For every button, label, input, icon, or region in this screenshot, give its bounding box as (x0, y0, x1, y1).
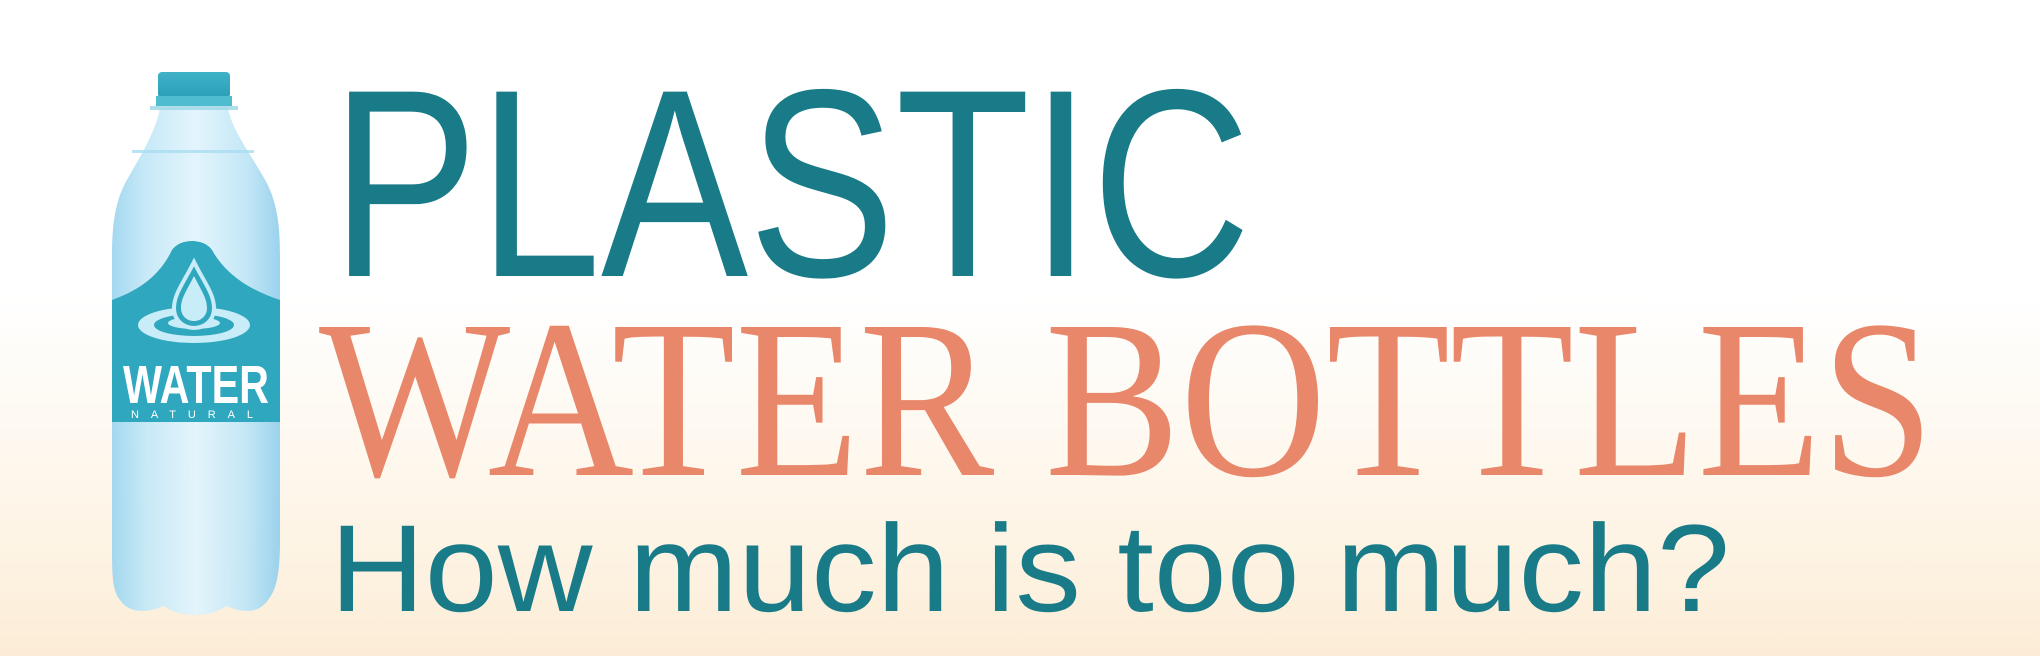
label text: WATER: WATER (123, 355, 269, 415)
water line (132, 150, 254, 153)
label band (112, 241, 280, 422)
subtitle: How much is too much?: How much is too much? (330, 500, 1730, 638)
bottle body (112, 108, 280, 615)
title: PLASTIC: PLASTIC (331, 33, 1251, 333)
bottle cap (158, 72, 230, 98)
drop logo (138, 262, 250, 343)
label text: NATURAL: NATURAL (131, 409, 261, 421)
icon: water bottle (112, 72, 280, 615)
